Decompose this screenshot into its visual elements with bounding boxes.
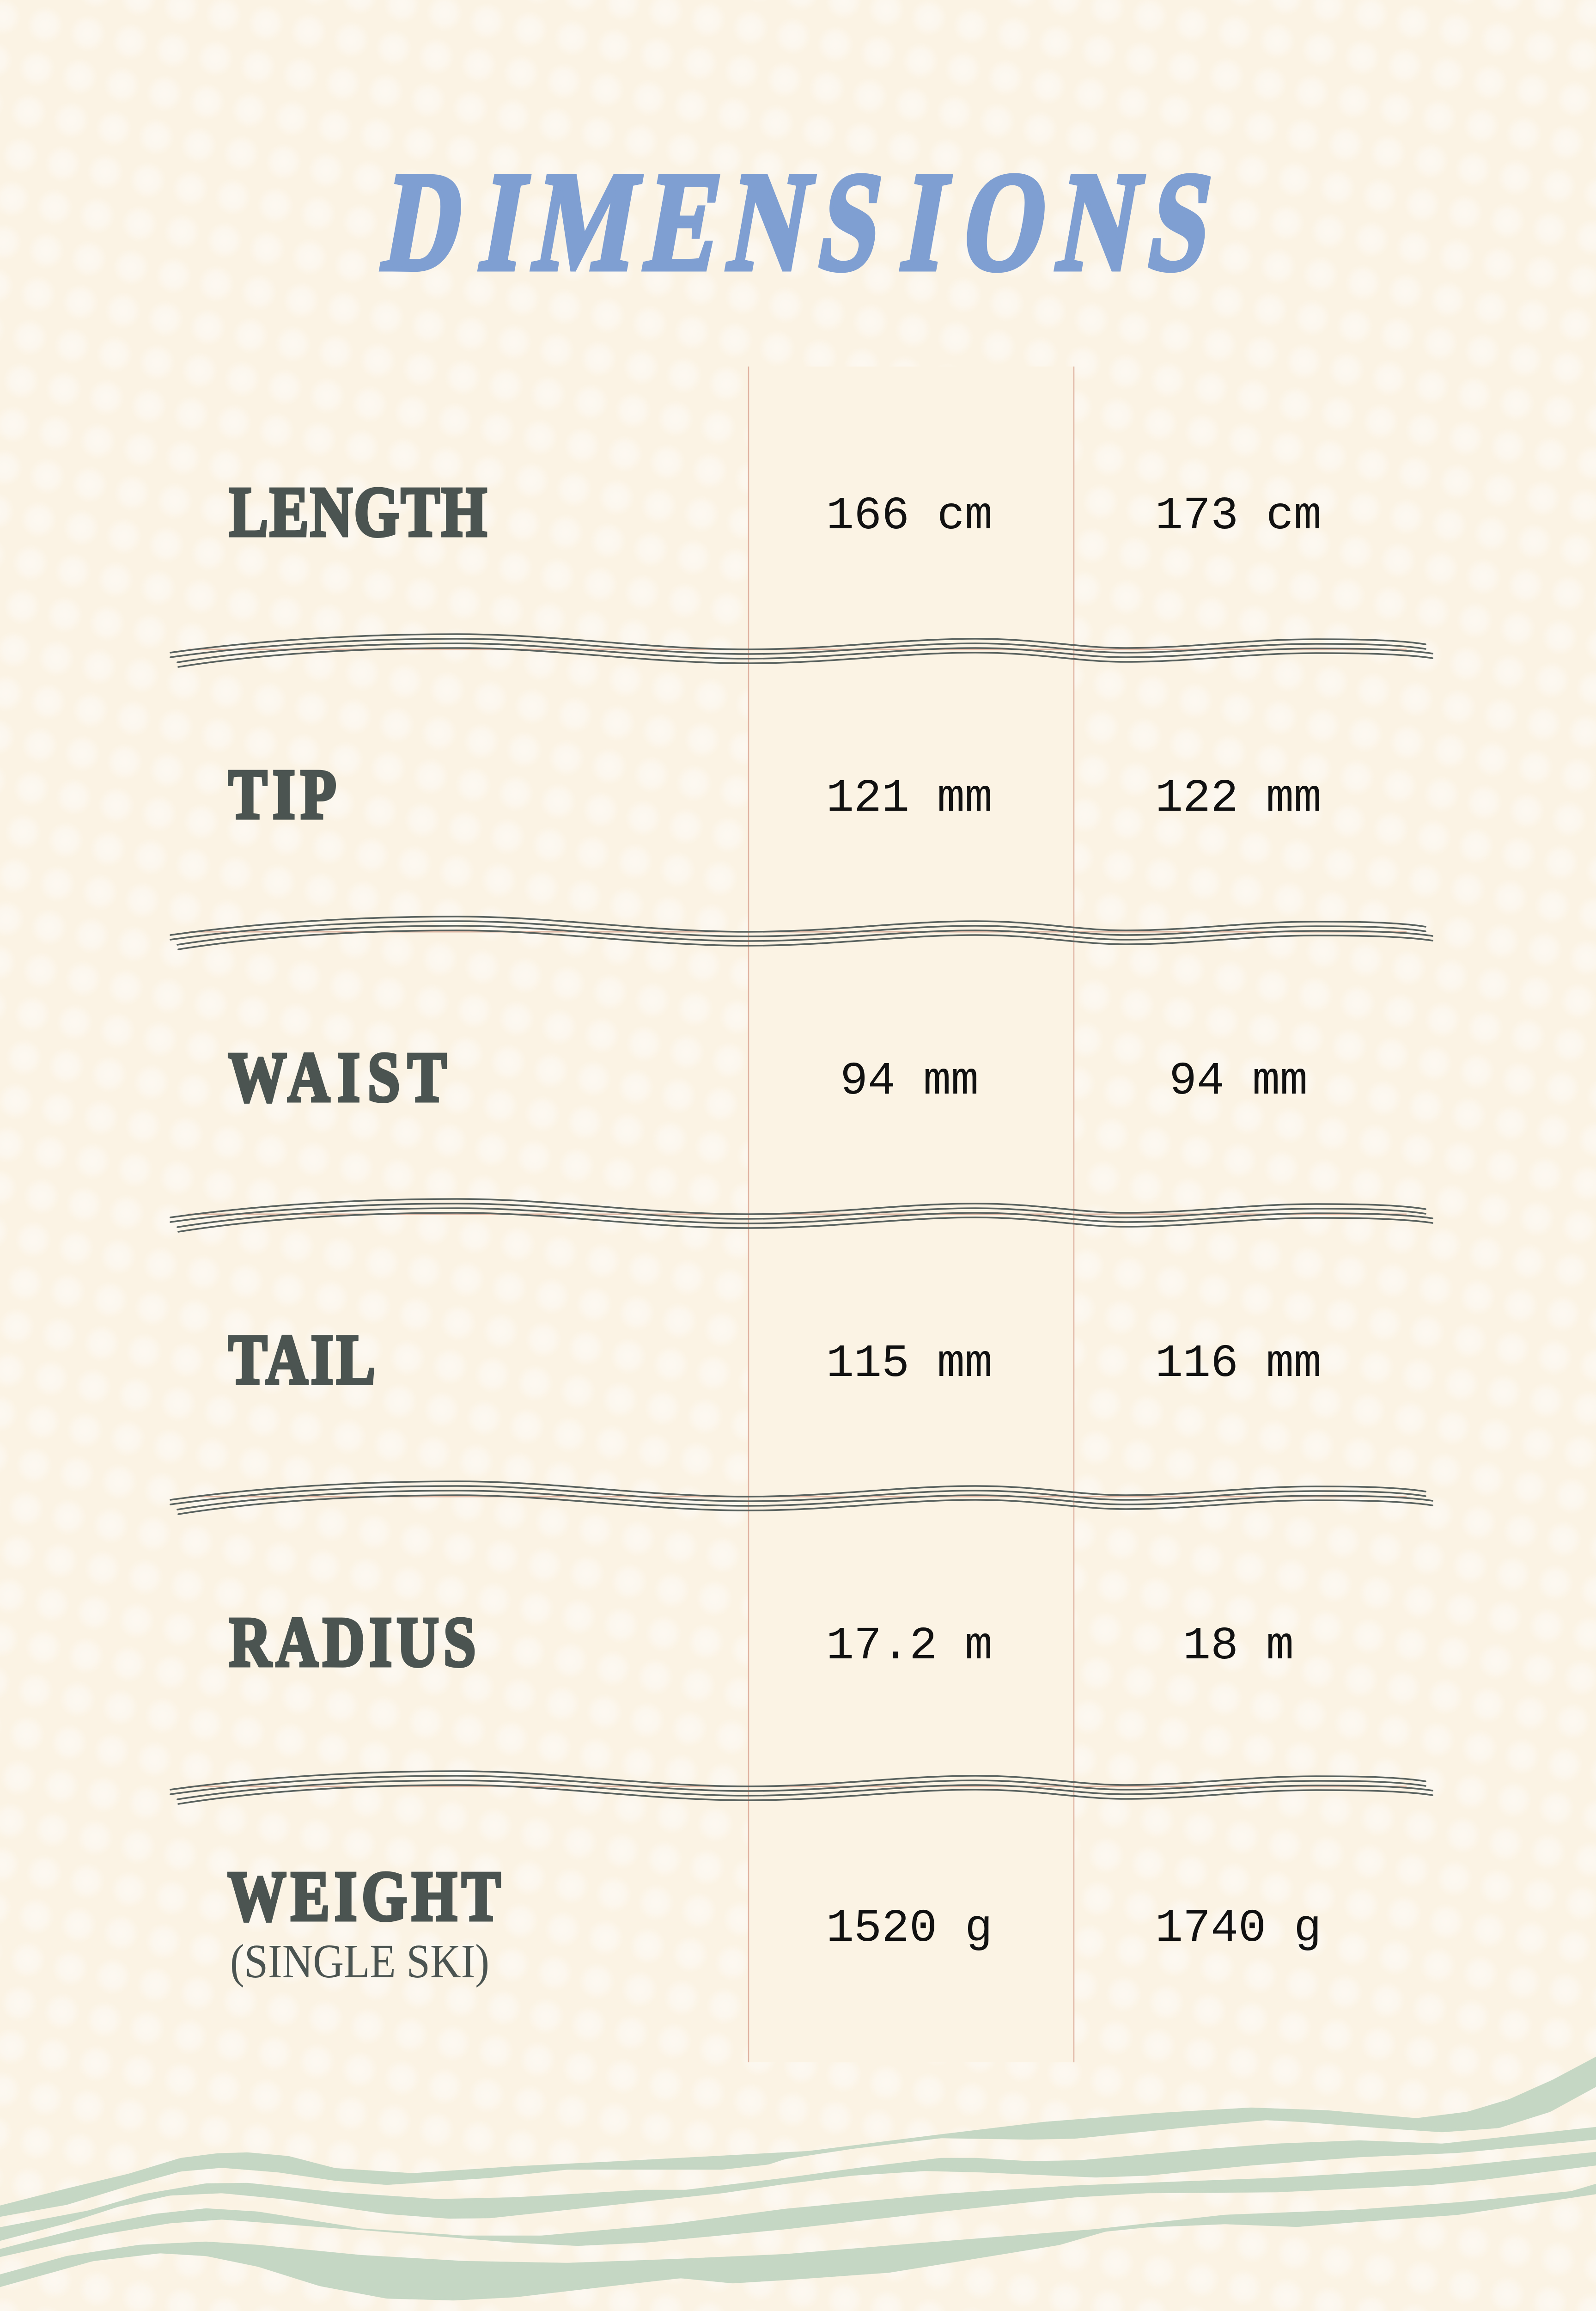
divider: wavy line 5 xyxy=(171,1771,1432,1804)
value: 122 mm: 122 mm xyxy=(1155,773,1322,825)
divider: wavy line 3 xyxy=(171,1199,1432,1232)
label: weight: WEIGHT xyxy=(228,1857,500,1936)
value: 115 mm: 115 mm xyxy=(826,1338,993,1390)
divider: wavy line 1 xyxy=(171,634,1432,667)
label: single ski: (SINGLE SKI) xyxy=(230,1935,489,1988)
value: 18 m: 18 m xyxy=(1183,1620,1294,1673)
value: 166 cm: 166 cm xyxy=(826,490,993,543)
row: weight xyxy=(228,1857,1322,1988)
value: 121 mm: 121 mm xyxy=(826,773,993,825)
label: waist: WAIST xyxy=(228,1038,446,1117)
value: 94 mm: 94 mm xyxy=(1169,1056,1308,1108)
value: 173 cm: 173 cm xyxy=(1155,490,1322,543)
wave band 3 xyxy=(0,2147,1596,2267)
value: 116 mm: 116 mm xyxy=(1155,1338,1322,1390)
wave band 4 xyxy=(0,2177,1596,2306)
value: 1740 g: 1740 g xyxy=(1155,1903,1322,1955)
value: 1520 g: 1520 g xyxy=(826,1903,993,1955)
divider: wavy line 2 xyxy=(171,917,1432,949)
row: tail xyxy=(228,1321,1322,1399)
value: 17.2 m: 17.2 m xyxy=(826,1620,993,1673)
label: tip: TIP xyxy=(228,755,336,834)
row: radius xyxy=(229,1603,1294,1681)
wave band 1 xyxy=(0,2027,1596,2227)
wave band 2 xyxy=(0,2121,1596,2251)
title: DIMENSIONS xyxy=(374,144,1224,300)
value: 94 mm: 94 mm xyxy=(840,1056,979,1108)
label: radius: RADIUS xyxy=(229,1603,476,1681)
label: tail: TAIL xyxy=(228,1321,375,1399)
row: length xyxy=(229,473,1322,551)
decoration: green waves at bottom xyxy=(0,2027,1596,2306)
row: waist xyxy=(228,1038,1308,1117)
divider: wavy line 4 xyxy=(171,1481,1432,1514)
panel: centre value column xyxy=(749,367,1074,2062)
row: tip xyxy=(228,755,1322,834)
label: length: LENGTH xyxy=(229,473,487,551)
